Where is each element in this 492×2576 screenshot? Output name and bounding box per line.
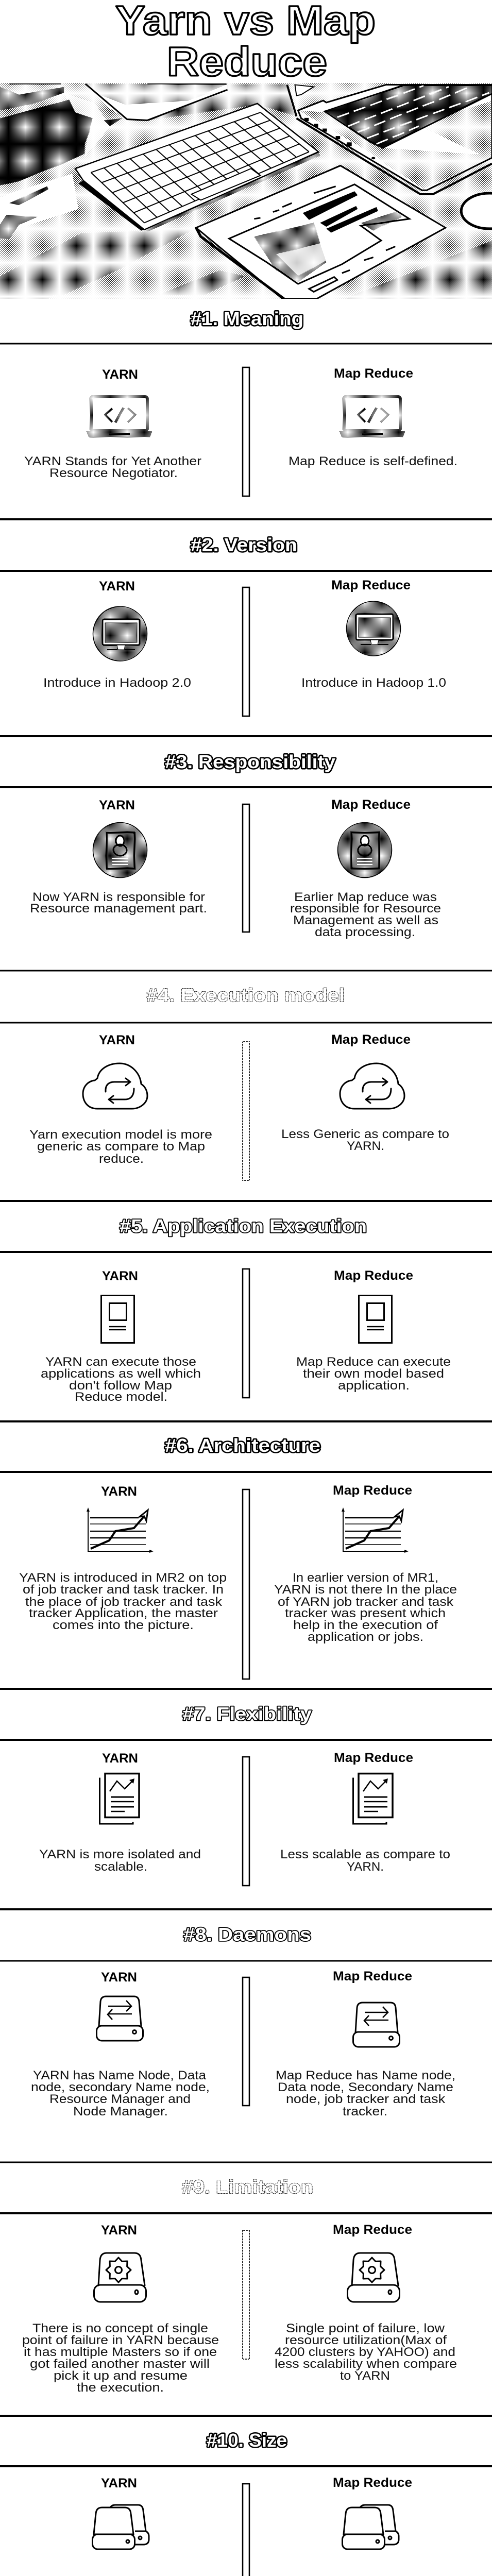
panel: YARN architecture (19, 1484, 227, 1632)
text: Map Reduce architecture: application or jobs. (308, 1630, 423, 1644)
label: Map Reduce: Map Reduce (334, 1751, 413, 1765)
icon: drive with transfer arrows (97, 1996, 143, 2041)
text: YARN application execution: don't follow Map (69, 1379, 172, 1393)
text: YARN daemons (31, 2069, 210, 2119)
panel: YARN responsibility (30, 798, 207, 916)
text: Map Reduce meaning: Map Reduce is self-defined. (289, 454, 457, 468)
text: YARN application execution (41, 1355, 201, 1404)
panel: YARN version (43, 579, 191, 690)
panel: YARN meaning (24, 367, 201, 480)
text: YARN execution model: Yarn execution model is more (29, 1128, 212, 1142)
heading: #7: #7. Flexibility (182, 1703, 312, 1724)
label: Map Reduce: Map Reduce (333, 2476, 412, 2490)
text: Map Reduce limitation: less scalability when compare (275, 2357, 457, 2371)
text: YARN responsibility: Now YARN is responsible for (32, 890, 205, 904)
text: YARN responsibility: Resource management part. (30, 902, 207, 916)
heading: #8: #8. Daemons (183, 1924, 311, 1945)
icon: monitor in circle (93, 606, 147, 661)
panel: Map Reduce limitation (275, 2223, 457, 2383)
text: YARN architecture: of job tracker and task tracker. In (23, 1583, 224, 1597)
text: Map Reduce application execution: their own model based (303, 1367, 444, 1381)
icon: drive with transfer arrows (353, 2003, 400, 2047)
panel: Map Reduce size (277, 2476, 455, 2576)
section 7: Flexibility (0, 1703, 492, 1909)
hero photo: keyboard, laptop and tablet on a desk (0, 83, 492, 300)
section 8: Daemons (0, 1924, 492, 2162)
text: Map Reduce architecture: YARN is not there In the place (274, 1583, 457, 1597)
text: YARN architecture: YARN is introduced in MR2 on top (19, 1571, 227, 1585)
icon: two drives (93, 2505, 149, 2549)
text: YARN execution model: reduce. (99, 1152, 144, 1166)
heading: #9: #9. Limitation (182, 2176, 313, 2197)
panel: Map Reduce daemons (276, 1969, 455, 2119)
text: YARN limitation: the execution. (77, 2381, 164, 2395)
text: Map Reduce daemons: tracker. (343, 2105, 387, 2119)
label: YARN: YARN (99, 798, 135, 812)
panel: Map Reduce execution model (281, 1032, 449, 1153)
icon: document (101, 1295, 134, 1343)
text: YARN flexibility: scalable. (94, 1860, 147, 1874)
panel: YARN flexibility (39, 1751, 201, 1874)
text: Map Reduce execution model: Less Generic as compare to (281, 1127, 449, 1141)
text: Map Reduce limitation: 4200 clusters by YAHOO) and (275, 2345, 455, 2359)
label: YARN: YARN (102, 1269, 138, 1283)
label: Map Reduce: Map Reduce (334, 1268, 413, 1283)
icon: laptop with code (340, 397, 405, 437)
label: YARN: YARN (102, 367, 138, 382)
text: YARN flexibility (39, 1848, 201, 1874)
text: YARN application execution: applications as well which (41, 1367, 201, 1381)
text: YARN limitation: pick it up and resume (54, 2369, 188, 2383)
label: YARN: YARN (99, 579, 135, 594)
title (115, 0, 376, 84)
section 9: Limitation (0, 2176, 492, 2416)
text: Map Reduce flexibility (280, 1848, 450, 1874)
text: YARN daemons: YARN has Name Node, Data (33, 2069, 207, 2082)
section 3: Responsibility (0, 751, 492, 971)
icon: report with chart (100, 1773, 139, 1824)
icon: drive with gear (94, 2253, 146, 2302)
text: YARN meaning (24, 454, 201, 480)
text: Map Reduce execution model: YARN. (347, 1139, 384, 1153)
icon: monitor in circle (346, 601, 401, 656)
label: Map Reduce: Map Reduce (331, 1032, 411, 1047)
icon: two drives (342, 2505, 399, 2549)
icon: document (359, 1295, 392, 1343)
panel: Map Reduce flexibility (280, 1751, 450, 1874)
text: Map Reduce daemons: Map Reduce has Name node, (276, 2069, 455, 2082)
label: YARN: YARN (101, 1970, 137, 1985)
text: YARN daemons: Resource Manager and (49, 2092, 191, 2106)
text: Map Reduce application execution: Map Reduce can execute (296, 1355, 451, 1369)
panel: Map Reduce application execution (296, 1268, 451, 1393)
text: Map Reduce flexibility: Less scalable as compare to (280, 1848, 450, 1861)
text: YARN application execution: Reduce model. (75, 1390, 167, 1404)
text: YARN limitation: it has multiple Masters so if one (24, 2345, 217, 2359)
panel: Map Reduce meaning (289, 366, 457, 468)
text: YARN execution model (29, 1128, 212, 1166)
text: YARN architecture: the place of job tracker and task (25, 1595, 223, 1609)
panel: YARN application execution (41, 1269, 201, 1404)
heading: #6: #6. Architecture (165, 1435, 320, 1456)
icon: drive with gear (347, 2253, 400, 2302)
text: Map Reduce daemons: node, job tracker and task (286, 2092, 446, 2106)
text: Map Reduce limitation (275, 2321, 457, 2383)
text: Map Reduce daemons (276, 2069, 455, 2119)
text: Map Reduce limitation: to YARN (340, 2369, 390, 2383)
text: YARN limitation: point of failure in YARN because (22, 2333, 219, 2347)
text: YARN limitation: got failed another master will (30, 2357, 210, 2371)
text: Map Reduce version: Introduce in Hadoop 1.0 (301, 676, 446, 690)
section 1: Meaning (0, 308, 492, 519)
label: Map Reduce: Map Reduce (331, 578, 411, 592)
heading: #5: #5. Application Execution (120, 1215, 367, 1236)
text: YARN flexibility: YARN is more isolated and (39, 1848, 201, 1861)
icon: profile document in circle (93, 822, 147, 878)
panel: YARN limitation (22, 2223, 219, 2395)
text: YARN meaning: YARN Stands for Yet Another (24, 454, 201, 468)
text: YARN execution model: generic as compare to Map (37, 1140, 205, 1154)
label: YARN: YARN (99, 1033, 135, 1047)
section 4: Execution model (0, 985, 492, 1201)
title: Reduce (167, 39, 327, 84)
heading: #3: #3. Responsibility (165, 751, 335, 772)
icon: laptop with code (87, 397, 152, 437)
panel: Map Reduce responsibility (290, 798, 441, 939)
panel: Map Reduce version (301, 578, 446, 690)
icon: report with chart (353, 1773, 393, 1824)
icon: profile document in circle (338, 822, 392, 878)
text: Map Reduce responsibility: Earlier Map reduce was (294, 890, 437, 904)
text: Map Reduce application execution: application. (338, 1379, 410, 1393)
heading: #4: #4. Execution model (146, 985, 345, 1006)
text: Map Reduce architecture: help in the execution of (293, 1618, 438, 1632)
text: YARN application execution: YARN can execute those (45, 1355, 196, 1369)
panel: YARN execution model (29, 1033, 212, 1166)
label: Map Reduce: Map Reduce (333, 1483, 412, 1498)
label: YARN: YARN (101, 2223, 137, 2238)
text: Map Reduce architecture: In earlier version of MR1, (293, 1571, 438, 1585)
text: Map Reduce flexibility: YARN. (347, 1860, 384, 1874)
label: YARN: YARN (101, 1484, 137, 1499)
label: Map Reduce: Map Reduce (331, 798, 411, 812)
section 5: Application Execution (0, 1215, 492, 1421)
label: Map Reduce: Map Reduce (334, 366, 413, 381)
text: YARN limitation (22, 2321, 219, 2395)
heading: #2: #2. Version (191, 534, 297, 555)
label: Map Reduce: Map Reduce (333, 1969, 412, 1984)
label: YARN: YARN (101, 2476, 137, 2490)
panel: YARN size (36, 2476, 205, 2576)
text: YARN architecture: tracker Application, the master (29, 1606, 218, 1620)
heading: #10: #10. Size (207, 2430, 287, 2451)
text: YARN meaning: Resource Negotiator. (49, 466, 178, 480)
text: YARN version: Introduce in Hadoop 2.0 (43, 676, 191, 690)
text: Map Reduce responsibility: data processing. (315, 925, 415, 939)
icon: rising line chart (87, 1507, 154, 1553)
text: Map Reduce application execution (296, 1355, 451, 1393)
section 2: Version (0, 534, 492, 736)
text: YARN responsibility (30, 890, 207, 916)
text: YARN daemons: Node Manager. (73, 2105, 168, 2119)
text: Map Reduce execution model (281, 1127, 449, 1153)
text: YARN architecture: comes into the picture. (53, 1618, 194, 1632)
icon: cloud with sync arrows (83, 1063, 147, 1109)
text: YARN daemons: node, secondary Name node, (31, 2080, 210, 2094)
text: Map Reduce daemons: Data node, Secondary Name (278, 2080, 453, 2094)
icon: rising line chart (342, 1507, 409, 1553)
text: Map Reduce responsibility (290, 890, 441, 939)
section 10: Size (0, 2430, 492, 2576)
label: YARN: YARN (102, 1751, 138, 1766)
text: Map Reduce limitation: resource utilization(Max of (285, 2333, 447, 2347)
text: Map Reduce responsibility: Management as well as (293, 913, 438, 927)
panel: Map Reduce architecture (274, 1483, 457, 1644)
text: Map Reduce architecture (274, 1571, 457, 1644)
icon: cloud with sync arrows (340, 1063, 404, 1109)
text: Map Reduce architecture: of YARN job tracker and task (278, 1595, 454, 1609)
panel: YARN daemons (31, 1970, 210, 2119)
section 6: Architecture (0, 1435, 492, 1689)
heading: #1: #1. Meaning (191, 308, 303, 329)
text: Map Reduce architecture: tracker was present which (285, 1606, 446, 1620)
label: Map Reduce: Map Reduce (333, 2223, 412, 2237)
text: Map Reduce responsibility: responsible for Resource (290, 902, 441, 916)
text: Map Reduce limitation: Single point of failure, low (286, 2321, 445, 2335)
text: YARN architecture (19, 1571, 227, 1632)
text: YARN limitation: There is no concept of single (32, 2321, 208, 2335)
